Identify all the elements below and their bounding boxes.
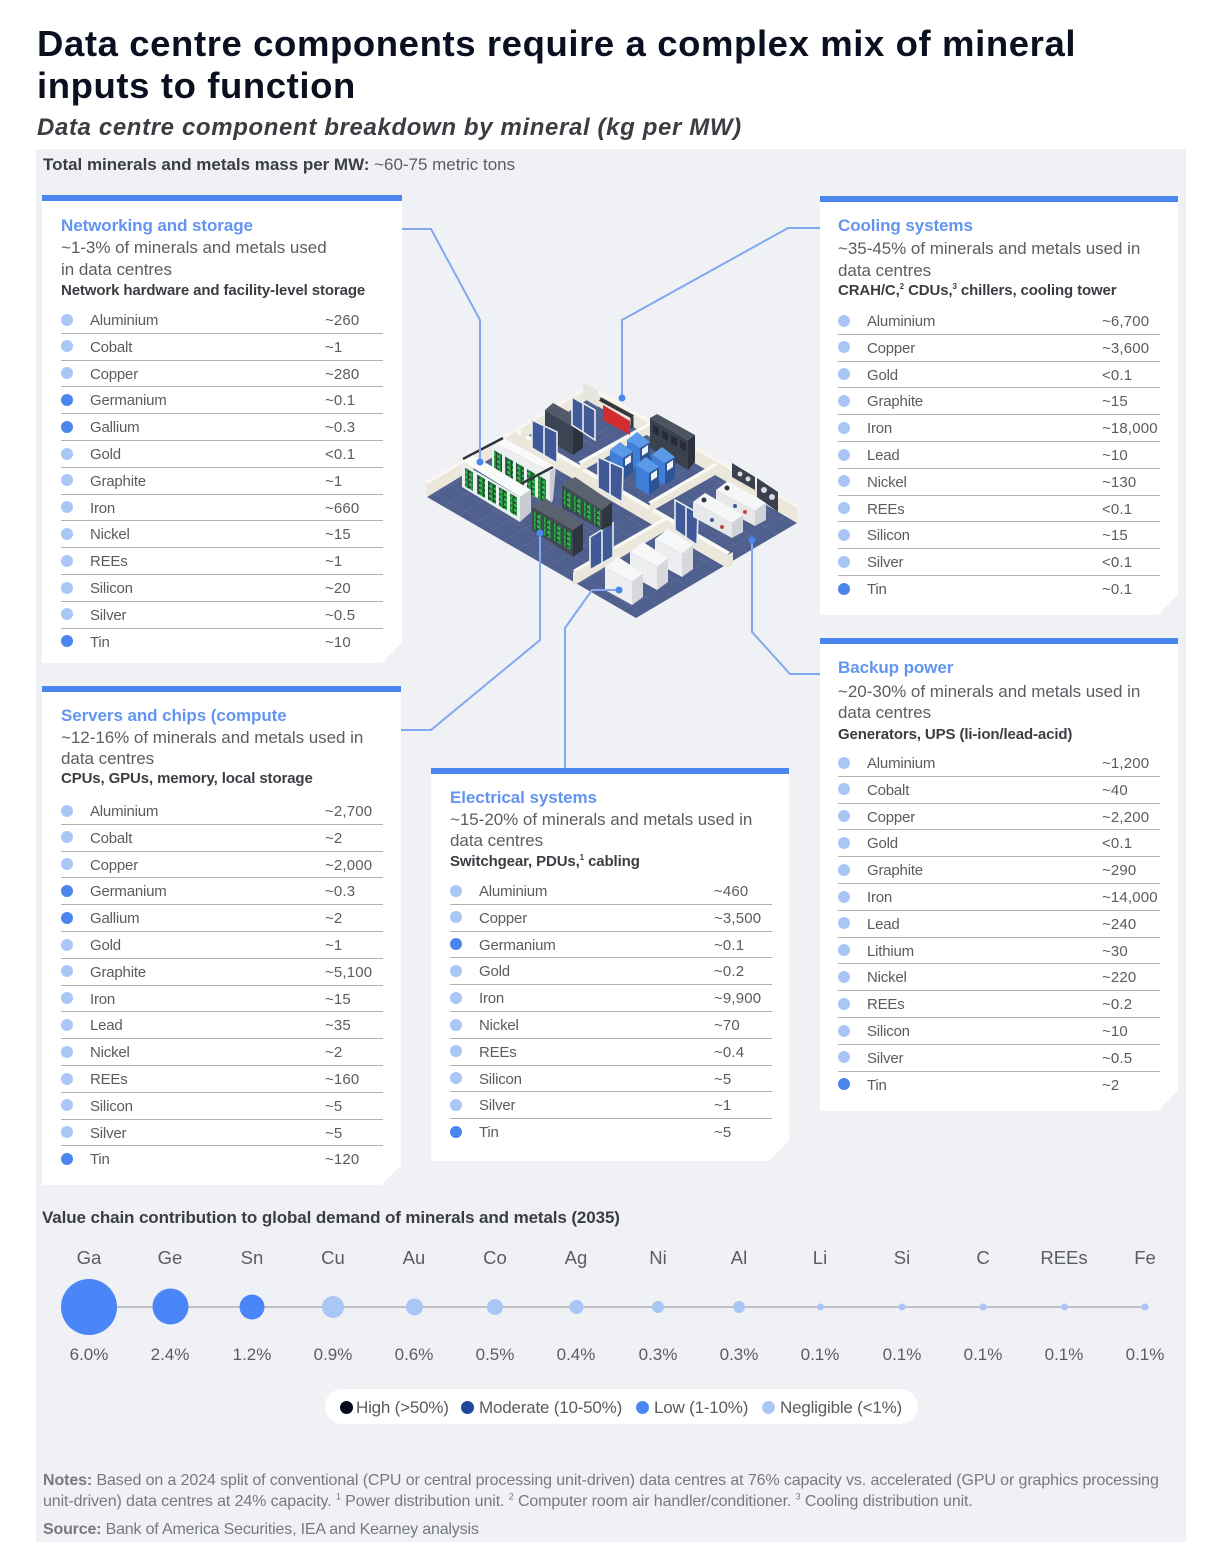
share text: data centres	[838, 261, 931, 280]
mineral list: ~10	[325, 634, 351, 651]
mineral list: ~260	[325, 312, 359, 329]
components: Generators, UPS (li-ion/lead-acid)	[838, 726, 1072, 743]
mineral list: ~460	[714, 883, 748, 900]
components: Network hardware and facility-level storage	[61, 282, 365, 299]
bubbles	[61, 1279, 1148, 1335]
blue cooling racks	[610, 432, 675, 495]
mineral list: Silver	[90, 1125, 126, 1142]
mineral list	[61, 314, 383, 647]
components: CRAH/C,2 CDUs,3 chillers, cooling tower	[838, 282, 1116, 299]
notes: unit-driven) data centres at 24% capacity. 1 Power distribution unit. 2 Computer room air handler/conditioner. 3 Cooling distribution unit.	[43, 1492, 973, 1510]
bubble chart: value chain contribution: 0.1%	[1045, 1345, 1083, 1364]
share text	[838, 685, 1140, 718]
mineral list: Iron	[867, 889, 892, 906]
mineral list: Aluminium	[90, 803, 158, 820]
mineral list: Copper	[867, 809, 915, 826]
share text: ~35-45% of minerals and metals used in	[838, 239, 1140, 258]
mineral list: Graphite	[90, 964, 146, 981]
mineral list: <0.1	[1102, 501, 1132, 518]
mineral list: ~5,100	[325, 964, 372, 981]
bubble chart: value chain contribution: Ga	[77, 1247, 101, 1268]
mineral list: <0.1	[1102, 367, 1132, 384]
mineral list: Gold	[479, 963, 510, 980]
mineral list: ~280	[325, 366, 359, 383]
bubble chart: value chain contribution: 2.4%	[151, 1345, 189, 1364]
fan panels	[732, 463, 778, 512]
mineral list: Gold	[90, 937, 121, 954]
mineral list: ~14,000	[1102, 889, 1158, 906]
bubble chart: value chain contribution: 6.0%	[70, 1345, 108, 1364]
mineral list: Tin	[90, 634, 110, 651]
total mass text: Total minerals and metals mass per MW: ~60-75 metric tons	[43, 155, 515, 174]
mineral list: ~0.2	[1102, 996, 1132, 1013]
mineral list: REEs	[867, 996, 905, 1013]
mineral list: ~20	[325, 580, 351, 597]
notes	[43, 1472, 1159, 1510]
heading: Electrical systems	[450, 788, 597, 807]
red cooling unit	[600, 399, 633, 435]
title: Data centre components require a complex mix of mineral	[37, 23, 1076, 64]
bubble chart: value chain contribution: C	[976, 1247, 990, 1268]
white door panel	[583, 383, 598, 407]
bubble chart: value chain contribution: Ag	[565, 1247, 587, 1268]
mineral list: Silicon	[867, 527, 910, 544]
mineral list: Silver	[867, 1050, 903, 1067]
mineral list: ~0.5	[325, 607, 355, 624]
mineral list: ~15	[325, 526, 351, 543]
heading: Cooling systems	[838, 216, 973, 235]
mineral list: <0.1	[1102, 835, 1132, 852]
mineral list: ~3,500	[714, 910, 761, 927]
mineral list: Graphite	[90, 473, 146, 490]
mineral list: ~5	[714, 1124, 731, 1141]
mineral list: Tin	[479, 1124, 499, 1141]
mineral list: REEs	[479, 1044, 517, 1061]
share text: data centres	[450, 831, 543, 850]
mineral list: ~18,000	[1102, 420, 1158, 437]
mineral list: Silver	[479, 1097, 515, 1114]
mineral list: Silicon	[90, 580, 133, 597]
mineral list: ~220	[1102, 969, 1136, 986]
bubble chart: value chain contribution: REEs	[1040, 1247, 1088, 1268]
mineral list: ~5	[325, 1125, 342, 1142]
bubble chart: value chain contribution: Au	[403, 1247, 425, 1268]
element symbols	[77, 1247, 1156, 1268]
mineral list: Tin	[867, 581, 887, 598]
mineral list: Iron	[867, 420, 892, 437]
mineral list: ~0.1	[714, 937, 744, 954]
mineral list: Gold	[90, 446, 121, 463]
mineral list: Aluminium	[479, 883, 547, 900]
mineral list: Silicon	[867, 1023, 910, 1040]
heading: Servers and chips (compute	[61, 706, 287, 725]
mineral list: ~2	[325, 1044, 342, 1061]
generators	[693, 481, 766, 538]
mineral list	[838, 315, 1160, 595]
mineral list: ~2,200	[1102, 809, 1149, 826]
mineral list: Gallium	[90, 910, 139, 927]
mineral list: ~2,000	[325, 857, 372, 874]
bubble chart: value chain contribution: Si	[894, 1247, 910, 1268]
mineral list: REEs	[90, 553, 128, 570]
bubble chart: value chain contribution: 0.1%	[964, 1345, 1002, 1364]
mineral list: Lead	[90, 1017, 123, 1034]
bubble chart: value chain contribution: Co	[483, 1247, 507, 1268]
mineral list: ~1,200	[1102, 755, 1149, 772]
value chain heading: Value chain contribution to global demand of minerals and metals (2035)	[42, 1208, 620, 1227]
leader line: servers and chips	[401, 530, 544, 730]
mineral list: Nickel	[867, 474, 907, 491]
mineral list: ~30	[1102, 943, 1128, 960]
mineral list: ~1	[325, 473, 342, 490]
leader line: backup power	[748, 536, 820, 674]
share text: ~12-16% of minerals and metals used in	[61, 728, 363, 747]
mineral list: ~0.3	[325, 883, 355, 900]
title	[37, 23, 1076, 106]
mineral list: <0.1	[1102, 554, 1132, 571]
bubble chart: value chain contribution: 0.1%	[801, 1345, 839, 1364]
mineral list: Tin	[867, 1077, 887, 1094]
dark green rack back	[562, 477, 612, 530]
mineral list: Tin	[90, 1151, 110, 1168]
mineral list: Cobalt	[90, 339, 132, 356]
bubble chart: value chain contribution: Cu	[321, 1247, 345, 1268]
mineral list: Copper	[479, 910, 527, 927]
mineral list	[450, 885, 772, 1138]
server row front	[462, 455, 531, 522]
bubble chart: value chain contribution: Li	[813, 1247, 827, 1268]
share text: ~15-20% of minerals and metals used in	[450, 810, 752, 829]
mineral list: ~2	[1102, 1077, 1119, 1094]
mineral list: Cobalt	[90, 830, 132, 847]
components: Switchgear, PDUs,1 cabling	[450, 853, 640, 870]
panel: electrical systems	[431, 768, 789, 1161]
mineral list: ~15	[1102, 393, 1128, 410]
leader line: cooling systems	[618, 228, 820, 402]
mineral list: ~160	[325, 1071, 359, 1088]
mineral list: Cobalt	[867, 782, 909, 799]
share text: data centres	[838, 703, 931, 722]
panel: servers and chips	[42, 686, 401, 1185]
bubble chart: value chain contribution: 0.9%	[314, 1345, 352, 1364]
mineral list: Copper	[867, 340, 915, 357]
mineral list: Germanium	[90, 883, 167, 900]
mineral list: REEs	[90, 1071, 128, 1088]
percentages	[70, 1345, 1164, 1364]
bubble chart: value chain contribution: 0.4%	[557, 1345, 595, 1364]
mineral list: Nickel	[90, 1044, 130, 1061]
share text	[838, 242, 1140, 276]
mineral list: ~120	[325, 1151, 359, 1168]
mineral list: ~40	[1102, 782, 1128, 799]
mineral list: Copper	[90, 857, 138, 874]
mineral list: REEs	[867, 501, 905, 518]
mineral list: Iron	[479, 990, 504, 1007]
mineral list: Aluminium	[90, 312, 158, 329]
mineral list: Aluminium	[867, 755, 935, 772]
mineral list: ~10	[1102, 1023, 1128, 1040]
mineral list	[61, 805, 383, 1165]
mineral list: ~35	[325, 1017, 351, 1034]
mineral list: ~9,900	[714, 990, 761, 1007]
mineral list: ~5	[714, 1071, 731, 1088]
mineral list: Germanium	[90, 392, 167, 409]
bubble chart: value chain contribution: 0.6%	[395, 1345, 433, 1364]
dark green rack front	[532, 498, 583, 557]
mineral list: ~0.1	[1102, 581, 1132, 598]
mineral list: ~3,600	[1102, 340, 1149, 357]
bubble chart: value chain contribution: Ni	[649, 1247, 667, 1268]
heading: Backup power	[838, 658, 953, 677]
mineral list: Germanium	[479, 937, 556, 954]
leader line: electrical systems	[565, 586, 622, 768]
doors	[532, 397, 698, 570]
legend: Negligible (<1%)	[780, 1398, 902, 1417]
mineral list: ~660	[325, 500, 359, 517]
share text: ~20-30% of minerals and metals used in	[838, 682, 1140, 701]
mineral list: ~0.1	[325, 392, 355, 409]
bubble chart: value chain contribution: Al	[731, 1247, 747, 1268]
mineral list: Lithium	[867, 943, 914, 960]
mineral list: ~15	[325, 991, 351, 1008]
panel: networking and storage	[42, 195, 402, 663]
mineral list: Gallium	[90, 419, 139, 436]
bubble chart: value chain contribution: 0.1%	[1126, 1345, 1164, 1364]
share text: ~1-3% of minerals and metals used	[61, 238, 327, 257]
mineral list: ~6,700	[1102, 313, 1149, 330]
legend: Low (1-10%)	[654, 1398, 748, 1417]
mineral list: ~70	[714, 1017, 740, 1034]
electrical cabinets	[605, 529, 693, 605]
share text	[62, 241, 326, 275]
mineral list: Graphite	[867, 862, 923, 879]
floor	[427, 392, 797, 618]
mineral list: ~1	[714, 1097, 731, 1114]
source: Source: Bank of America Securities, IEA and Kearney analysis	[43, 1521, 479, 1538]
mineral list: Silicon	[90, 1098, 133, 1115]
bubble chart: value chain contribution	[61, 1247, 1164, 1364]
bubble chart: value chain contribution: 0.5%	[476, 1345, 514, 1364]
bubble chart: value chain contribution: 0.3%	[720, 1345, 758, 1364]
mineral list: ~0.2	[714, 963, 744, 980]
mineral list: ~2	[325, 910, 342, 927]
legend: Moderate (10-50%)	[479, 1398, 622, 1417]
components: CPUs, GPUs, memory, local storage	[61, 770, 313, 787]
mineral list: Nickel	[479, 1017, 519, 1034]
mineral list: Nickel	[867, 969, 907, 986]
mineral list: ~0.5	[1102, 1050, 1132, 1067]
dark rack: centre	[545, 403, 583, 455]
mineral list: ~0.4	[714, 1044, 744, 1061]
share text	[62, 731, 362, 764]
heading: Networking and storage	[61, 216, 253, 235]
mineral list: ~15	[1102, 527, 1128, 544]
mineral list: Aluminium	[867, 313, 935, 330]
mineral list: ~2	[325, 830, 342, 847]
mineral list: ~1	[325, 339, 342, 356]
share text: data centres	[61, 749, 154, 768]
mineral list: ~1	[325, 937, 342, 954]
outer walls	[425, 385, 797, 523]
panel: cooling systems	[820, 196, 1178, 615]
title: inputs to function	[37, 65, 356, 106]
mineral list: Silicon	[479, 1071, 522, 1088]
mineral list: Nickel	[90, 526, 130, 543]
mineral list: Silver	[90, 607, 126, 624]
mineral list: <0.1	[325, 446, 355, 463]
mineral list: Iron	[90, 500, 115, 517]
subtitle: Data centre component breakdown by mineral (kg per MW)	[37, 114, 742, 141]
mineral list: ~240	[1102, 916, 1136, 933]
share text	[450, 813, 752, 846]
mineral list: ~2,700	[325, 803, 372, 820]
server row back	[463, 436, 556, 505]
mineral list: Copper	[90, 366, 138, 383]
legend: High (>50%)	[356, 1398, 449, 1417]
mineral list	[838, 757, 1160, 1090]
bubble chart: value chain contribution: 1.2%	[233, 1345, 271, 1364]
mineral list: Gold	[867, 835, 898, 852]
mineral list: ~5	[325, 1098, 342, 1115]
bubble chart: value chain contribution: Ge	[158, 1247, 182, 1268]
dark rack: upper right	[650, 414, 695, 470]
mineral list: ~1	[325, 553, 342, 570]
panel: backup power	[820, 638, 1178, 1111]
mineral list: ~130	[1102, 474, 1136, 491]
share text: in data centres	[61, 260, 172, 279]
legend	[325, 1389, 918, 1424]
mineral list: ~10	[1102, 447, 1128, 464]
mineral list: Silver	[867, 554, 903, 571]
leader line: networking and storage	[402, 229, 484, 466]
bubble chart: value chain contribution: 0.1%	[883, 1345, 921, 1364]
mineral list: Iron	[90, 991, 115, 1008]
bubble chart: value chain contribution: 0.3%	[639, 1345, 677, 1364]
mineral list: Lead	[867, 447, 900, 464]
bubble chart: value chain contribution: Sn	[241, 1247, 263, 1268]
interior walls	[513, 395, 733, 586]
notes: Notes: Based on a 2024 split of conventional (CPU or central processing unit-driven) data centres at 76% capacity vs. accelerated (GPU or graphics processing	[43, 1472, 1159, 1489]
bubble chart: value chain contribution: Fe	[1134, 1247, 1156, 1268]
mineral list: Gold	[867, 367, 898, 384]
mineral list: Graphite	[867, 393, 923, 410]
mineral list: ~0.3	[325, 419, 355, 436]
mineral list: ~290	[1102, 862, 1136, 879]
mineral list: Lead	[867, 916, 900, 933]
